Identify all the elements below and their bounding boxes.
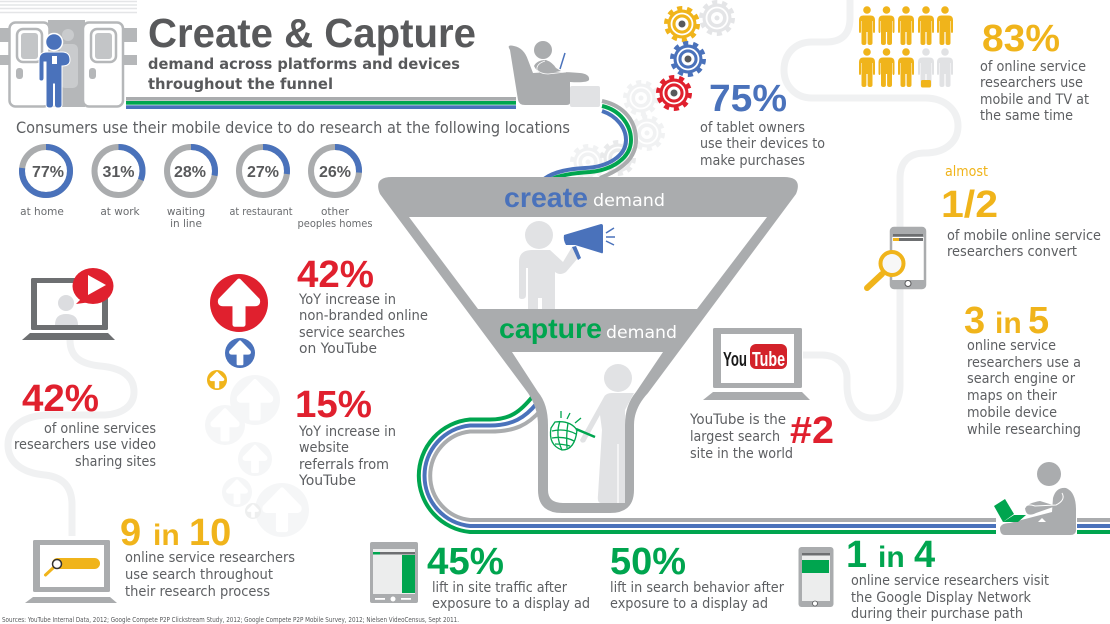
donut: 26% other peoples homes: peoples homes — [298, 218, 372, 230]
decorative ghost gears — [572, 82, 662, 178]
label: capture demand: demand — [606, 323, 677, 343]
stat: 83% — [980, 18, 1089, 124]
stat: 45%: lift in site traffic after — [432, 580, 567, 596]
donut: 28% waiting in line: in line — [170, 218, 202, 230]
stat: 83%: 83% — [982, 18, 1060, 60]
top tricolor path — [126, 97, 636, 179]
stat: 9 in 10: their research process — [125, 584, 270, 600]
funnel: lower opening — [512, 352, 663, 503]
sources footnote: Sources: YouTube Internal Data, 2012; Google Compete P2P Clickstream Study, 2012; Google Compete P2P Mobile Survey, 2012; Nielsen VideoCensus, Sept 2011. — [2, 616, 459, 624]
stat: 3 in 5: while researching — [967, 422, 1081, 438]
icon: person with green laptop — [994, 462, 1077, 537]
stat: 15% YoY: YoY increase in — [298, 424, 396, 440]
stat: 1 in 4: 4 — [914, 534, 935, 576]
stat: 15% YoY: 15% — [295, 384, 372, 426]
stat: 42% video sharing: researchers use video — [14, 437, 156, 453]
stat: 3 in 5: 3 — [964, 300, 985, 342]
stat: 75% tablet owners — [700, 78, 825, 169]
stat: YouTube #2: largest search — [690, 429, 780, 445]
subtitle — [148, 55, 460, 93]
stat: YouTube #2: site in the world — [690, 446, 793, 462]
decorative ghost arrows — [205, 375, 309, 537]
stat: 75% tablet owners: use their devices to — [700, 136, 825, 152]
stat: 1 in 4: during their purchase path — [851, 606, 1023, 622]
stat: 75% tablet owners: 75% — [709, 78, 787, 120]
funnel: upper opening — [409, 217, 767, 309]
donut: 28% waiting in line — [167, 147, 215, 230]
donut: 28% waiting in line: waiting — [167, 206, 205, 218]
stat: 83%: the same time — [980, 108, 1073, 124]
stat: 3 in 5: maps on their — [967, 388, 1057, 404]
stat: 45% — [427, 541, 590, 612]
stat: 15% YoY: referrals from — [299, 457, 389, 473]
stat: 15% YoY: website — [299, 440, 349, 456]
stat: almost 1/2: 1/2 — [941, 184, 998, 226]
icon: YouTube laptop — [703, 328, 810, 400]
stat: 45%: exposure to a display ad — [432, 596, 590, 612]
stat: 3 in 5 — [964, 300, 1081, 438]
icon: megaphone — [564, 224, 615, 260]
stat: 1 in 4: online service researchers visit — [851, 573, 1049, 589]
icon: laptop with search bar — [25, 540, 117, 603]
stat: 1 in 4: the Google Display Network — [851, 590, 1032, 606]
label: create demand: create — [504, 182, 588, 213]
stat: 3 in 5: 5 — [1028, 300, 1049, 342]
stat: 42% YoY: 42% — [297, 254, 374, 296]
stat: 42% video sharing: of online services — [44, 421, 156, 437]
stat: 42% YoY: non-branded online — [299, 308, 428, 324]
heading: consumers: Consumers use their mobile device to do research at the following locations — [16, 118, 570, 137]
stat: almost 1/2: of mobile online service — [947, 228, 1101, 244]
icon: people 83% — [859, 6, 953, 88]
stat: 9 in 10 — [120, 512, 295, 600]
stat: 3 in 5: mobile device — [967, 405, 1057, 421]
background trail: right side — [784, 0, 958, 418]
stat: YouTube #2: #2 — [790, 410, 834, 452]
donut: 28% waiting in line: 28% — [174, 164, 206, 181]
stat: 83%: mobile and TV at — [980, 92, 1089, 108]
stat: 9 in 10: use search throughout — [125, 567, 273, 583]
icon: butterfly net — [550, 411, 595, 450]
stat: almost 1/2: researchers convert — [947, 244, 1077, 260]
donut: 26% other peoples homes — [298, 147, 372, 230]
stat: 42% YoY: on YouTube — [299, 341, 377, 357]
stat: 50%: lift in search behavior after — [610, 580, 784, 596]
stat: 9 in 10: in — [153, 519, 180, 552]
stat: 9 in 10: online service researchers — [125, 550, 295, 566]
icon: laptop with video bubble — [22, 268, 115, 340]
icon: gears — [658, 2, 732, 108]
donut: 27% at restaurant — [230, 147, 292, 218]
donut: 26% other peoples homes: 26% — [319, 164, 351, 181]
icon: subway doors with commuter — [0, 2, 137, 108]
background trail: left side — [8, 340, 134, 536]
stat: 42% YoY: YoY increase in — [298, 292, 396, 308]
stat: 50%: 50% — [610, 541, 686, 583]
stat: 75% tablet owners: make purchases — [700, 153, 805, 169]
stat: 3 in 5: online service — [967, 338, 1056, 354]
stat: 3 in 5: in — [995, 307, 1022, 340]
label: capture demand: capture — [499, 313, 602, 344]
label: capture demand — [499, 313, 677, 344]
stat: 3 in 5: search engine or — [967, 371, 1075, 387]
stat: 42% YoY — [297, 254, 428, 357]
stat: almost 1/2: almost — [945, 164, 988, 180]
icon: phone with display ad — [798, 547, 834, 607]
icon: person in armchair with tablet — [509, 41, 600, 107]
stat: 83%: researchers use — [980, 75, 1083, 91]
stat: 9 in 10: 10 — [189, 512, 231, 554]
person with net — [550, 364, 634, 503]
stat: 45%: 45% — [427, 541, 504, 583]
subtitle: throughout the funnel — [148, 75, 333, 93]
icon: phone with magnifier — [867, 228, 925, 288]
donut: 77% at home: at home — [20, 206, 64, 218]
stat: 1 in 4: in — [878, 541, 905, 574]
stat: 50% — [610, 541, 784, 612]
donut: 27% at restaurant: at restaurant — [230, 206, 292, 218]
stat: 15% YoY — [295, 384, 396, 489]
funnel — [378, 177, 798, 513]
donut: 77% at home — [20, 147, 70, 218]
stat: 83%: of online service — [980, 59, 1086, 75]
stat: 75% tablet owners: of tablet owners — [700, 120, 805, 136]
person with megaphone — [519, 221, 615, 309]
stat: 1 in 4: 1 — [846, 534, 867, 576]
stat: YouTube #2: YouTube is the — [689, 412, 786, 428]
stat: 42% video sharing: 42% — [22, 378, 99, 420]
stat: 15% YoY: YouTube — [298, 473, 356, 489]
donut: 26% other peoples homes: other — [321, 206, 350, 218]
stat: YouTube #2 — [689, 410, 834, 462]
label: create demand — [504, 182, 665, 213]
stat: 50%: exposure to a display ad — [610, 596, 768, 612]
title: Create & Capture — [148, 10, 476, 56]
stat: 42% YoY: service searches — [299, 325, 405, 341]
stat: 42% video sharing — [14, 378, 156, 470]
donut: 31% at work: at work — [100, 206, 141, 218]
donut: 27% at restaurant: 27% — [247, 164, 279, 181]
bottom tricolor path — [419, 396, 1110, 532]
donut: 77% at home: 77% — [32, 164, 64, 181]
label: create demand: demand — [593, 191, 665, 211]
stat: 42% video sharing: sharing sites — [75, 454, 156, 470]
donut charts — [20, 147, 372, 230]
icon: rising arrows — [207, 274, 268, 390]
donut: 31% at work — [94, 147, 142, 218]
icon: YouTube laptop: Tube — [752, 349, 785, 371]
stat: almost 1/2 — [941, 164, 1101, 260]
icon: YouTube laptop: You — [723, 349, 747, 371]
icon: tablet with display ad — [370, 542, 418, 603]
stat: 1 in 4 — [846, 534, 1049, 622]
stat: 9 in 10: 9 — [120, 512, 141, 554]
donut: 31% at work: 31% — [102, 164, 135, 181]
stat: 3 in 5: researchers use a — [967, 355, 1081, 371]
subtitle: demand across platforms and devices — [148, 55, 460, 73]
